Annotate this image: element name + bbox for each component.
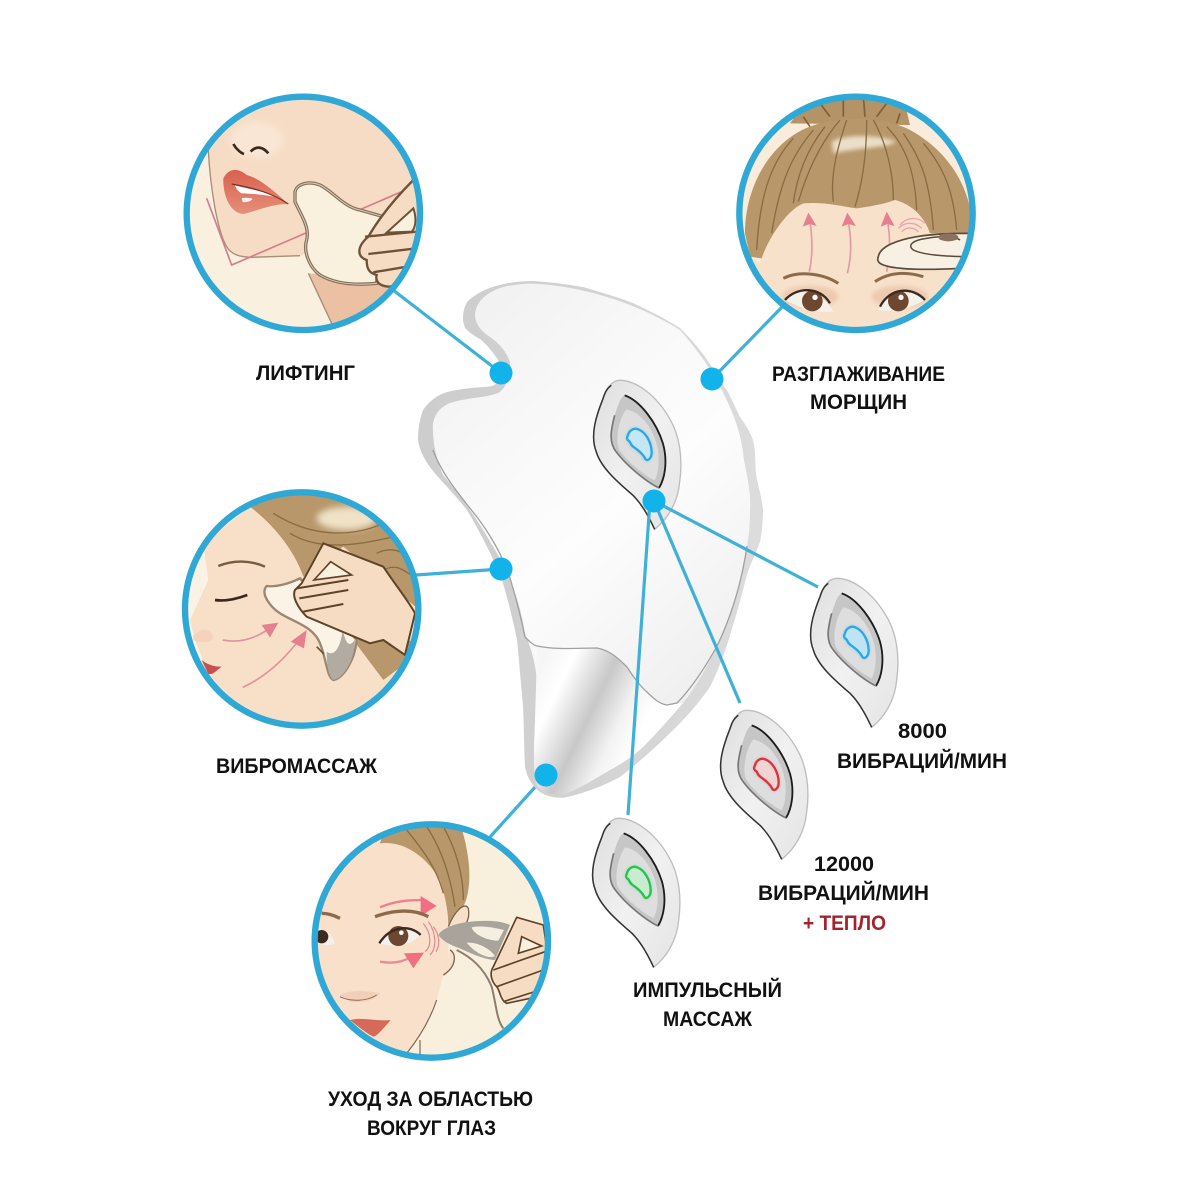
label: 8000 vibrations: ВИБРАЦИЙ/МИН [837, 749, 1007, 773]
label: eye area care: ВОКРУГ ГЛАЗ [367, 1117, 496, 1140]
label: vibromassage: ВИБРОМАССАЖ [216, 755, 378, 778]
label: lifting: ЛИФТИНГ [256, 362, 355, 385]
label: wrinkle smoothing [772, 363, 945, 414]
label: eye area care: УХОД ЗА ОБЛАСТЬЮ [328, 1088, 533, 1111]
indicator: 8000 vibrations, blue [811, 578, 898, 727]
label: impulse massage [633, 978, 782, 1031]
label: impulse massage: ИМПУЛЬСНЫЙ [633, 978, 782, 1002]
indicator: 12000 vibrations, red [721, 710, 808, 859]
indicator: impulse massage, green [593, 818, 680, 967]
label: 12000 vibrations plus heat: ВИБРАЦИЙ/МИН [758, 881, 929, 905]
connector lines [393, 290, 782, 837]
label: 12000 vibrations plus heat: 12000 [814, 853, 874, 876]
device grey rim [418, 281, 763, 798]
label: 8000 vibrations [837, 720, 1007, 773]
device white body [433, 284, 750, 795]
label: wrinkle smoothing: МОРЩИН [810, 391, 907, 414]
label: impulse massage: МАССАЖ [663, 1008, 753, 1031]
panel: vibromassage illustration [180, 490, 423, 733]
panel: eye area illustration [310, 820, 553, 1063]
label: 12000 vibrations plus heat [758, 853, 929, 935]
label: 12000 vibrations plus heat: + ТЕПЛО [803, 912, 886, 935]
lines to indicator modes [628, 501, 818, 815]
device silver tip [534, 646, 683, 795]
panel: wrinkle smoothing illustration [736, 94, 976, 334]
connection dots [490, 362, 724, 786]
device button [594, 380, 681, 529]
device: gua sha massager [418, 281, 763, 798]
label: wrinkle smoothing: РАЗГЛАЖИВАНИЕ [772, 363, 945, 386]
label: 8000 vibrations: 8000 [898, 720, 947, 743]
panel: lifting illustration [184, 94, 424, 334]
label: eye area care [328, 1088, 533, 1140]
